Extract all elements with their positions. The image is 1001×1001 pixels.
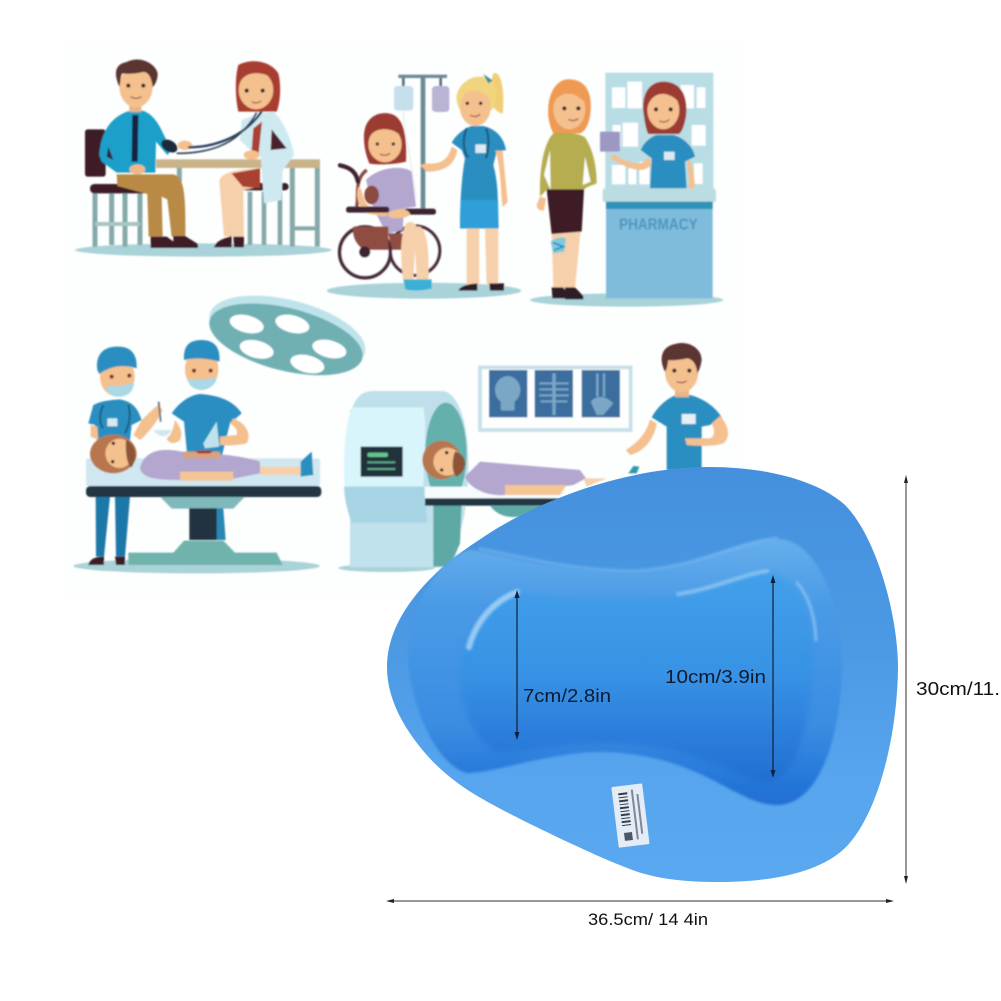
illustration background panel [63,40,745,598]
MRI table with patient [422,441,639,517]
dimension: 30cm height [904,475,1000,884]
ground shadows [327,283,723,307]
ground shadow [75,243,332,257]
scene: MRI and x-ray [338,343,728,572]
patient in wheelchair [340,113,440,291]
counter label: PHARMACY [619,216,698,233]
basin floor [459,573,813,783]
bedpan outer body [387,467,898,882]
operating table with patient [86,435,321,497]
ground shadow [338,564,435,572]
dimension: 36.5cm length [386,899,894,929]
dimension: 7cm inner width: 7cm/2.8in [523,686,611,706]
pharmacy shelves [605,73,713,189]
dimension: 7cm inner width [514,590,611,740]
table [156,159,320,247]
pharmacist [600,82,695,188]
doctor with stethoscope [177,61,294,247]
dimension: 10cm inner width [665,575,776,778]
rim of the basin [408,539,842,805]
dimension: 10cm inner width: 10cm/3.9in [665,667,766,687]
ground shadow [73,559,320,573]
medicine card [600,132,620,152]
operating table base [128,497,283,565]
seated man [99,60,198,248]
MRI machine [344,391,468,567]
technician [626,343,728,470]
surgeon with stethoscope [88,347,163,565]
rim highlights [469,538,816,647]
scene: blood pressure consultation [75,60,332,257]
IV stand [394,75,449,210]
woman with bandaged knee [537,79,597,299]
second surgeon [153,340,249,457]
pharmacy counter [603,188,716,298]
dimension: 36.5cm length: 36.5cm/ 14 4in [588,910,708,929]
x-ray panel [480,367,631,430]
product: blue bedpan [387,467,898,882]
patient chair [85,129,147,247]
MRI screen [361,447,403,477]
surgical lamp [202,282,373,389]
illustration: hospital scenes [73,60,728,573]
scene: wheelchair and pharmacy [327,73,723,307]
dimension: 30cm height: 30cm/11. [916,679,1000,699]
scene: operating theatre [73,282,373,573]
barcode sticker [611,783,650,848]
nurse with IV [420,73,507,291]
